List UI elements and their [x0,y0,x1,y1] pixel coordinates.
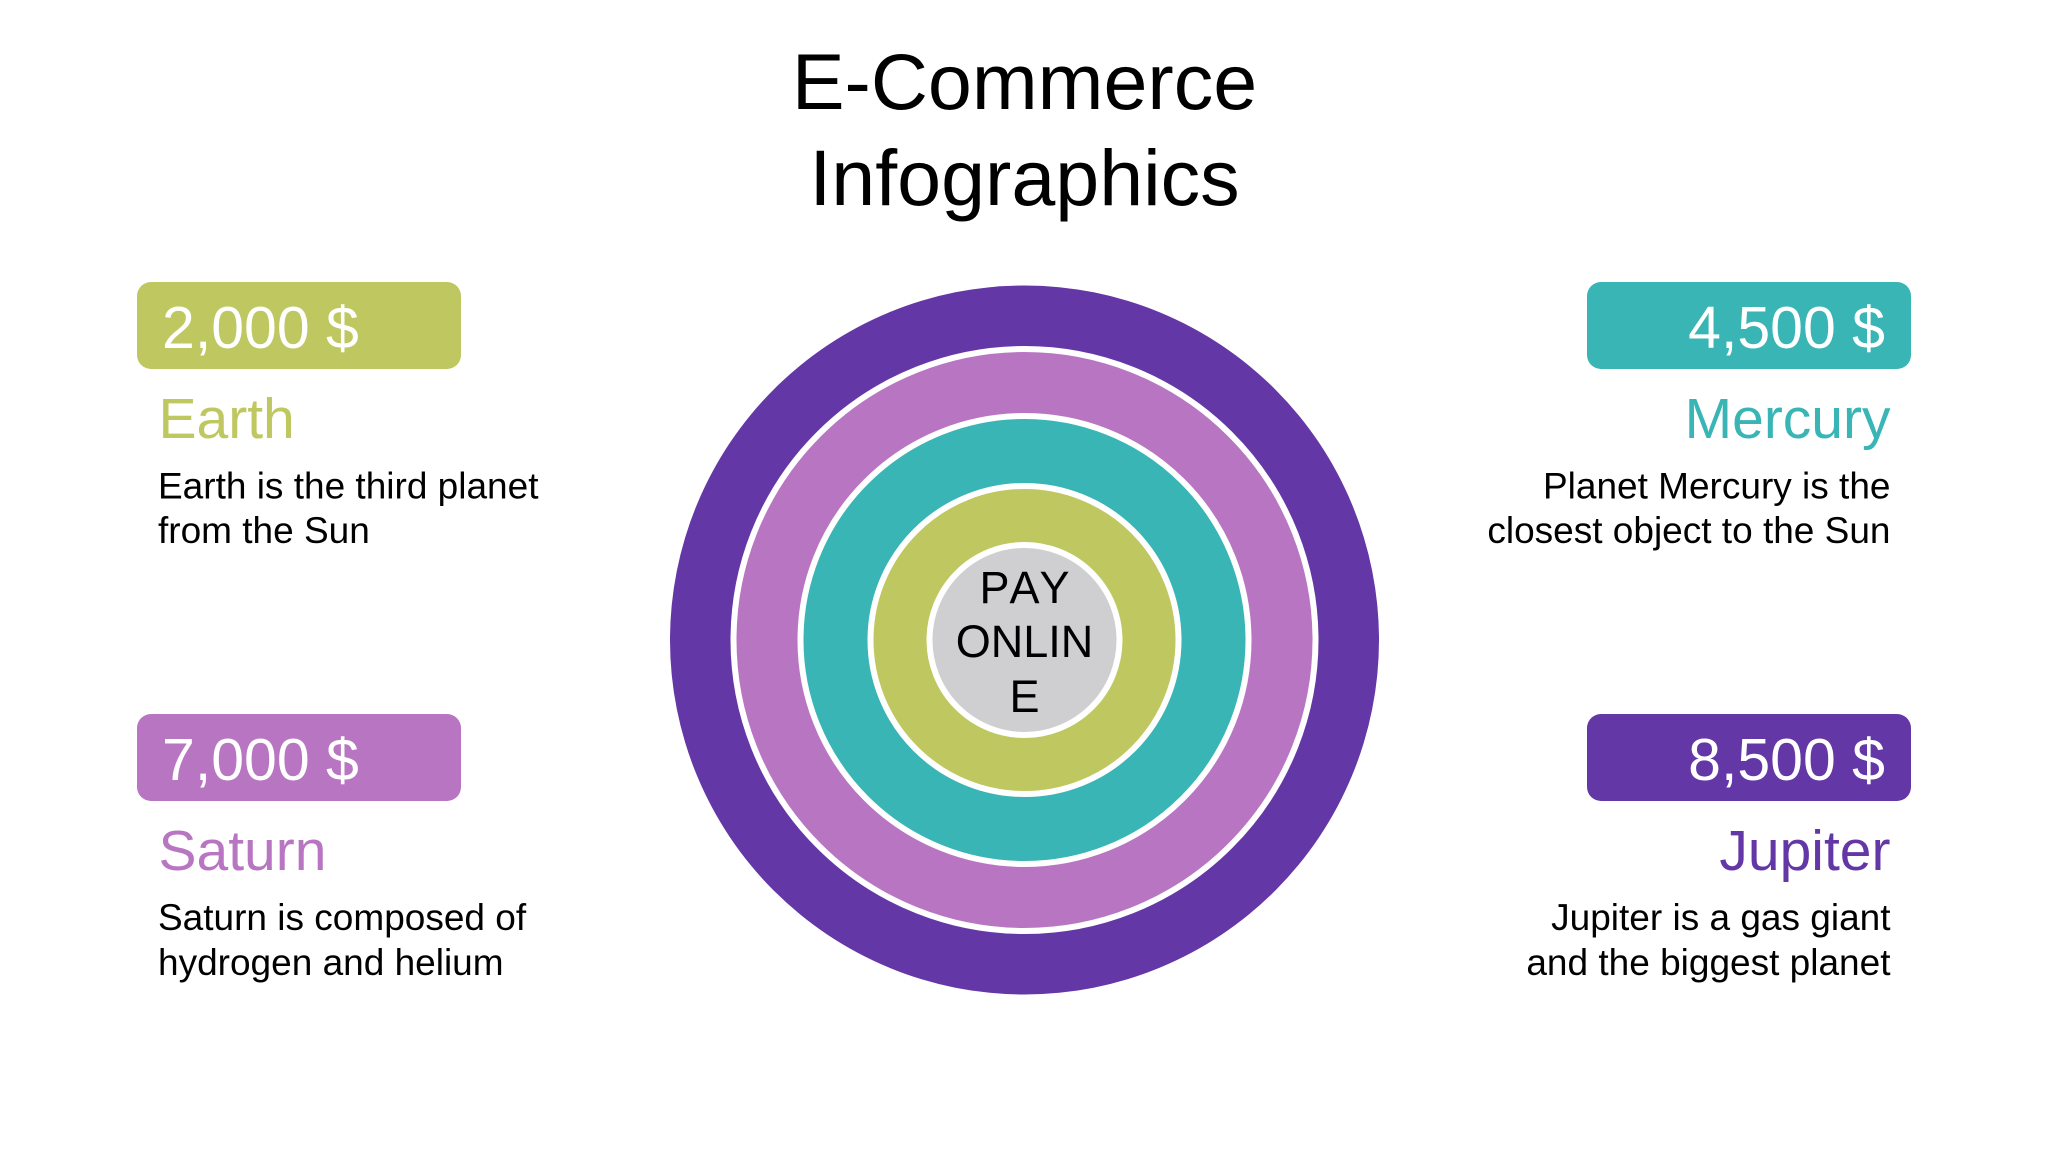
ring: jupiter purple [670,286,1379,994]
description: earth [158,466,539,551]
description: saturn [158,897,527,983]
description: earth: from the Sun [158,510,370,551]
price badge: 4,500 $: 4,500 $ [1688,295,1885,361]
description: mercury [1487,466,1890,551]
heading: jupiter: Jupiter [1719,819,1891,883]
center label: pay online [956,562,1093,722]
description: earth: Earth is the third planet [158,466,539,506]
title: E-Commerce [792,37,1257,126]
description: saturn: Saturn is composed of [158,897,527,938]
heading: earth: Earth [158,387,295,451]
description: jupiter: and the biggest planet [1526,942,1891,983]
description: saturn: hydrogen and helium [158,942,504,983]
price badge: 4,500 $ [1587,282,1911,369]
ring: mercury teal [800,416,1248,864]
price badge: 8,500 $: 8,500 $ [1688,727,1885,793]
center label: pay online: ONLIN [956,616,1093,667]
center label: pay online: PAY [979,562,1070,613]
panel: earth [137,282,539,551]
center circle [930,545,1120,735]
description: jupiter: Jupiter is a gas giant [1551,897,1891,938]
title: Infographics [809,133,1240,222]
description: mercury: Planet Mercury is the [1543,466,1890,506]
panel: mercury [1487,282,1911,551]
price badge: 2,000 $: 2,000 $ [162,295,359,361]
title [792,37,1257,222]
ring: saturn pink [734,349,1316,931]
price badge: 7,000 $: 7,000 $ [162,727,359,793]
ring: earth olive [870,486,1178,794]
description: mercury: closest object to the Sun [1487,510,1890,551]
concentric circle diagram [670,286,1379,994]
price badge: 2,000 $ [137,282,461,369]
description: jupiter [1526,897,1891,983]
panel: jupiter [1526,714,1911,983]
heading: mercury: Mercury [1685,387,1891,451]
heading: saturn: Saturn [158,819,326,883]
price badge: 7,000 $ [137,714,461,801]
price badge: 8,500 $ [1587,714,1911,801]
panel: saturn [137,714,527,983]
center label: pay online: E [1009,671,1040,722]
